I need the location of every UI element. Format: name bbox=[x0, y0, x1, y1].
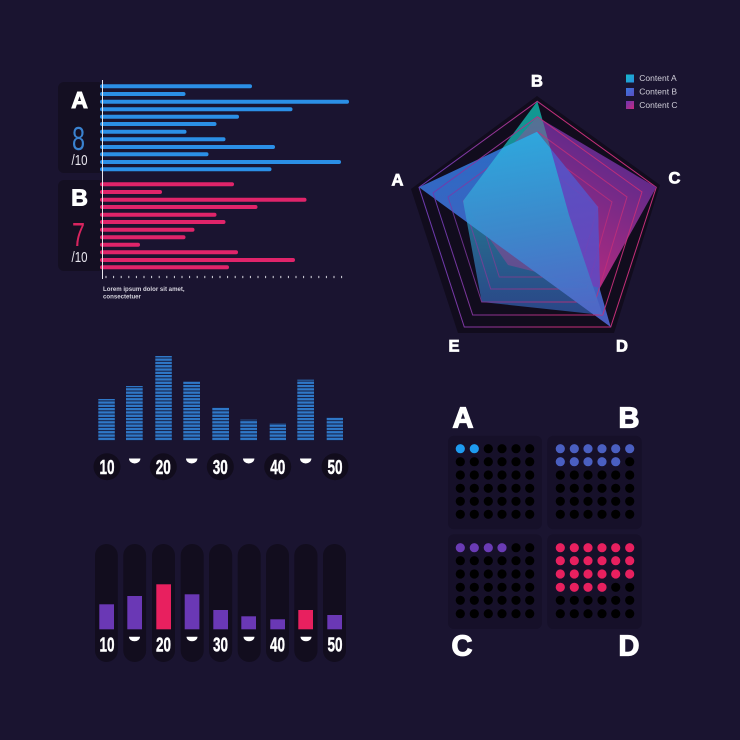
heading: A: A bbox=[71, 87, 88, 113]
label: B: B bbox=[531, 72, 543, 90]
caption: consectetuer bbox=[103, 294, 142, 300]
pill axis values: 30 bbox=[213, 634, 228, 656]
caption: Lorem ipsum dolor sit amet, bbox=[103, 286, 185, 293]
axis values: 40 bbox=[270, 457, 285, 479]
legend item: content B: Content B bbox=[639, 87, 677, 97]
label: E: E bbox=[448, 338, 460, 356]
axis values: 20 bbox=[156, 457, 171, 479]
legend item: content A: Content A bbox=[639, 73, 677, 83]
matrix letter B: B bbox=[619, 402, 639, 434]
overlap: B and C bbox=[536, 132, 600, 288]
half-circle markers bbox=[129, 458, 311, 464]
panel: score A bbox=[58, 82, 104, 173]
overlap: A and C bbox=[490, 117, 550, 272]
legend bbox=[626, 73, 678, 110]
matrix letter A: A bbox=[453, 402, 474, 434]
axis bbox=[102, 80, 348, 279]
score: 7 of 10: 7 bbox=[72, 216, 85, 253]
series: content B bbox=[419, 132, 611, 327]
matrix D bbox=[556, 543, 634, 618]
series: content C bbox=[463, 117, 656, 288]
matrix letter D: D bbox=[619, 630, 639, 662]
matrix A bbox=[456, 444, 534, 519]
pill bars bbox=[99, 584, 342, 629]
axis value circles bbox=[94, 453, 348, 480]
overlap: A and B bbox=[463, 132, 603, 315]
pill bar chart bbox=[95, 544, 346, 662]
radar chart bbox=[392, 72, 681, 356]
pill axis values: 20 bbox=[156, 634, 171, 656]
pill axis values: 10 bbox=[100, 634, 114, 656]
label: C: C bbox=[669, 170, 681, 188]
panel: horizontal bar chart bbox=[58, 80, 348, 300]
label: D: D bbox=[616, 338, 628, 356]
pill axis values: 40 bbox=[270, 634, 285, 656]
label: A: A bbox=[392, 172, 404, 190]
axis values bbox=[100, 457, 342, 479]
matrix letter C: C bbox=[452, 630, 473, 662]
bars: series B bbox=[102, 184, 304, 267]
legend item: content C: Content C bbox=[639, 100, 678, 110]
score: 8 of 10: /10 bbox=[72, 152, 88, 169]
series: content A bbox=[463, 101, 603, 315]
axis values: 30 bbox=[213, 457, 228, 479]
pill axis values bbox=[100, 634, 342, 656]
bars: series A bbox=[102, 86, 347, 169]
score: 8 of 10 bbox=[72, 120, 88, 169]
striped columns bbox=[98, 356, 343, 441]
axis values: 50 bbox=[328, 457, 342, 479]
matrix panel backgrounds bbox=[448, 436, 642, 629]
matrix C bbox=[456, 543, 534, 618]
panel: score B bbox=[58, 180, 104, 271]
pill axis values: 50 bbox=[328, 634, 342, 656]
pill half-circle markers bbox=[129, 637, 312, 641]
radar shadow bbox=[411, 96, 660, 333]
radar rings bbox=[433, 117, 642, 315]
score: 7 of 10: /10 bbox=[72, 249, 88, 266]
dot matrix panels bbox=[448, 402, 642, 662]
axis values: 10 bbox=[100, 457, 114, 479]
radar frame bbox=[419, 101, 656, 327]
pill tracks bbox=[95, 544, 346, 662]
matrix B bbox=[556, 444, 634, 519]
striped column chart bbox=[94, 356, 348, 480]
score: 8 of 10: 8 bbox=[72, 120, 85, 157]
axis labels bbox=[392, 72, 681, 356]
score: 7 of 10 bbox=[72, 216, 88, 266]
heading: B: B bbox=[71, 184, 88, 210]
